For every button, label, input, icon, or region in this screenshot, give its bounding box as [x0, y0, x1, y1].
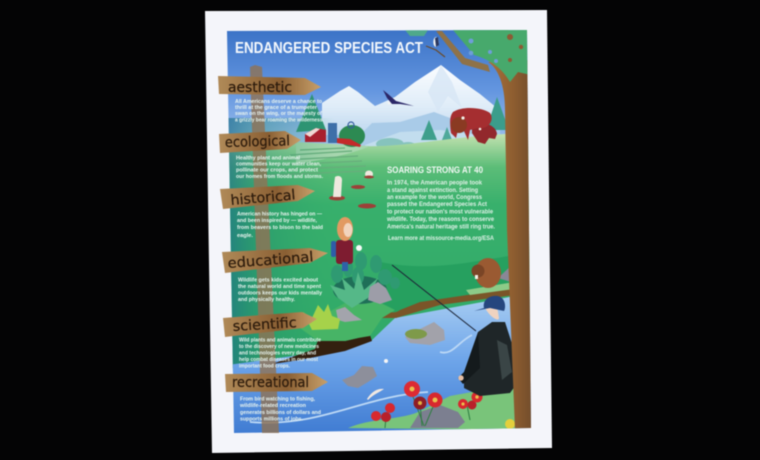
crop rows	[268, 148, 368, 175]
distant foliage	[405, 30, 428, 36]
bushes and rocks	[303, 252, 400, 330]
sign: ecological	[219, 131, 301, 153]
sign: historical	[220, 185, 315, 209]
prairie dogs and mounds	[329, 170, 376, 208]
sign: educational: educational	[227, 249, 314, 272]
text: aesthetic: thrill at the grace of a trumpeter	[235, 105, 318, 111]
text: scientific	[239, 338, 321, 370]
text: recreational: generates billions of dollars and	[240, 410, 321, 416]
text: soaring strong paragraph: In 1974, the American people took	[387, 180, 483, 186]
icon: eagle in flight	[383, 90, 414, 106]
beaver	[472, 258, 512, 288]
text: aesthetic	[235, 99, 324, 124]
heading: soaring strong at 40: SOARING STRONG AT 40	[387, 165, 483, 175]
mountains	[322, 65, 500, 150]
text: recreational: wildlife-related recreation	[239, 403, 307, 409]
text: soaring strong paragraph	[386, 180, 495, 231]
green hillside	[220, 134, 535, 370]
text: ecological: Healthy plant and animal	[236, 156, 300, 162]
grass ledges	[300, 300, 395, 341]
text: historical	[237, 212, 323, 239]
text: aesthetic: a grizzly bear roaming the wilderness.	[235, 118, 324, 124]
title: ENDANGERED SPECIES ACT	[235, 40, 423, 57]
text: educational: and physically healthy.	[238, 297, 295, 303]
text: scientific: important food crops.	[239, 364, 290, 370]
signpost	[250, 65, 279, 433]
evergreen behind trunk	[488, 97, 506, 131]
lower darker meadow band	[380, 255, 515, 312]
sign: scientific	[223, 312, 317, 337]
text: ecological: our homes from floods and storms.	[236, 174, 323, 180]
left text shading	[228, 118, 325, 370]
text: learn more link: Learn more at missource-media.org/ESA	[388, 236, 495, 242]
text: educational: the natural world and time spent	[238, 284, 321, 290]
sky	[226, 29, 528, 145]
text: recreational	[239, 396, 321, 422]
poster page	[205, 10, 552, 453]
distant trees	[376, 120, 452, 146]
tree trunk	[488, 60, 535, 430]
sign: aesthetic	[218, 76, 321, 96]
rocks in stream	[342, 366, 377, 388]
sign: recreational: recreational	[232, 375, 309, 391]
sign: scientific: scientific	[232, 315, 297, 335]
text: scientific: to the discovery of new medicines	[239, 344, 319, 350]
evergreen behind farm	[296, 94, 326, 132]
text: aesthetic: All Americans deserve a chance to	[235, 99, 323, 105]
tree foliage	[453, 30, 535, 82]
text: ecological	[236, 156, 323, 180]
text: soaring strong paragraph: to protect our nation's most vulnerable	[387, 210, 494, 216]
fishing rod	[392, 265, 476, 331]
text: historical: eagle.	[237, 233, 253, 239]
text: educational: outdoors keeps our kids mentally	[238, 290, 323, 296]
sign: historical: historical	[230, 187, 296, 209]
sign: recreational	[225, 373, 328, 392]
fisherman	[458, 296, 518, 396]
text: scientific: and technologies every day, and	[239, 350, 316, 356]
illustrated scene	[220, 28, 535, 435]
river bank	[375, 288, 515, 318]
text: aesthetic: swan on the wing, or the majesty of	[235, 111, 322, 117]
water ripples	[250, 335, 472, 423]
text: ecological: pollinate our crops, and protect	[236, 168, 318, 174]
bobber	[384, 359, 388, 363]
text: recreational: From bird watching to fishing,	[240, 396, 315, 402]
bison	[450, 108, 497, 144]
text: recreational: supports millions of jobs.	[240, 416, 303, 422]
text: soaring strong paragraph: America's natural heritage still ring true.	[387, 225, 495, 231]
sign: aesthetic: aesthetic	[228, 80, 292, 96]
text: historical: American history has hinged on —	[237, 212, 322, 218]
fish	[367, 389, 384, 400]
text: ecological: communities keep our water clean,	[236, 162, 321, 168]
text: scientific: Wild plants and animals contribute	[239, 338, 321, 344]
text: historical: and been inspired by — wildlife,	[237, 218, 317, 224]
text: soaring strong paragraph: wildlife. Today, the reasons to conserve	[386, 217, 495, 223]
girl	[331, 217, 362, 271]
text: soaring strong paragraph: a stand against extinction. Setting	[387, 188, 478, 194]
text: soaring strong paragraph: passed the Endangered Species Act	[387, 202, 487, 208]
text: scientific: help combat diseases in our most	[239, 357, 318, 363]
flowers	[371, 381, 515, 429]
text: educational	[238, 278, 323, 303]
small bird on branch	[426, 37, 445, 57]
farm	[305, 122, 365, 147]
text: soaring strong paragraph: an example for the world, Congress	[387, 195, 483, 201]
flower bank	[348, 384, 520, 430]
text: educational: Wildlife gets kids excited about	[238, 278, 318, 284]
tree branch	[436, 31, 490, 72]
turtle on rock	[405, 322, 445, 345]
text: historical: from beavers to bison to the bald	[237, 225, 323, 231]
sign: ecological: ecological	[225, 133, 290, 151]
rock among flowers	[410, 405, 465, 428]
water	[228, 296, 535, 435]
pale field near farm	[296, 142, 370, 164]
